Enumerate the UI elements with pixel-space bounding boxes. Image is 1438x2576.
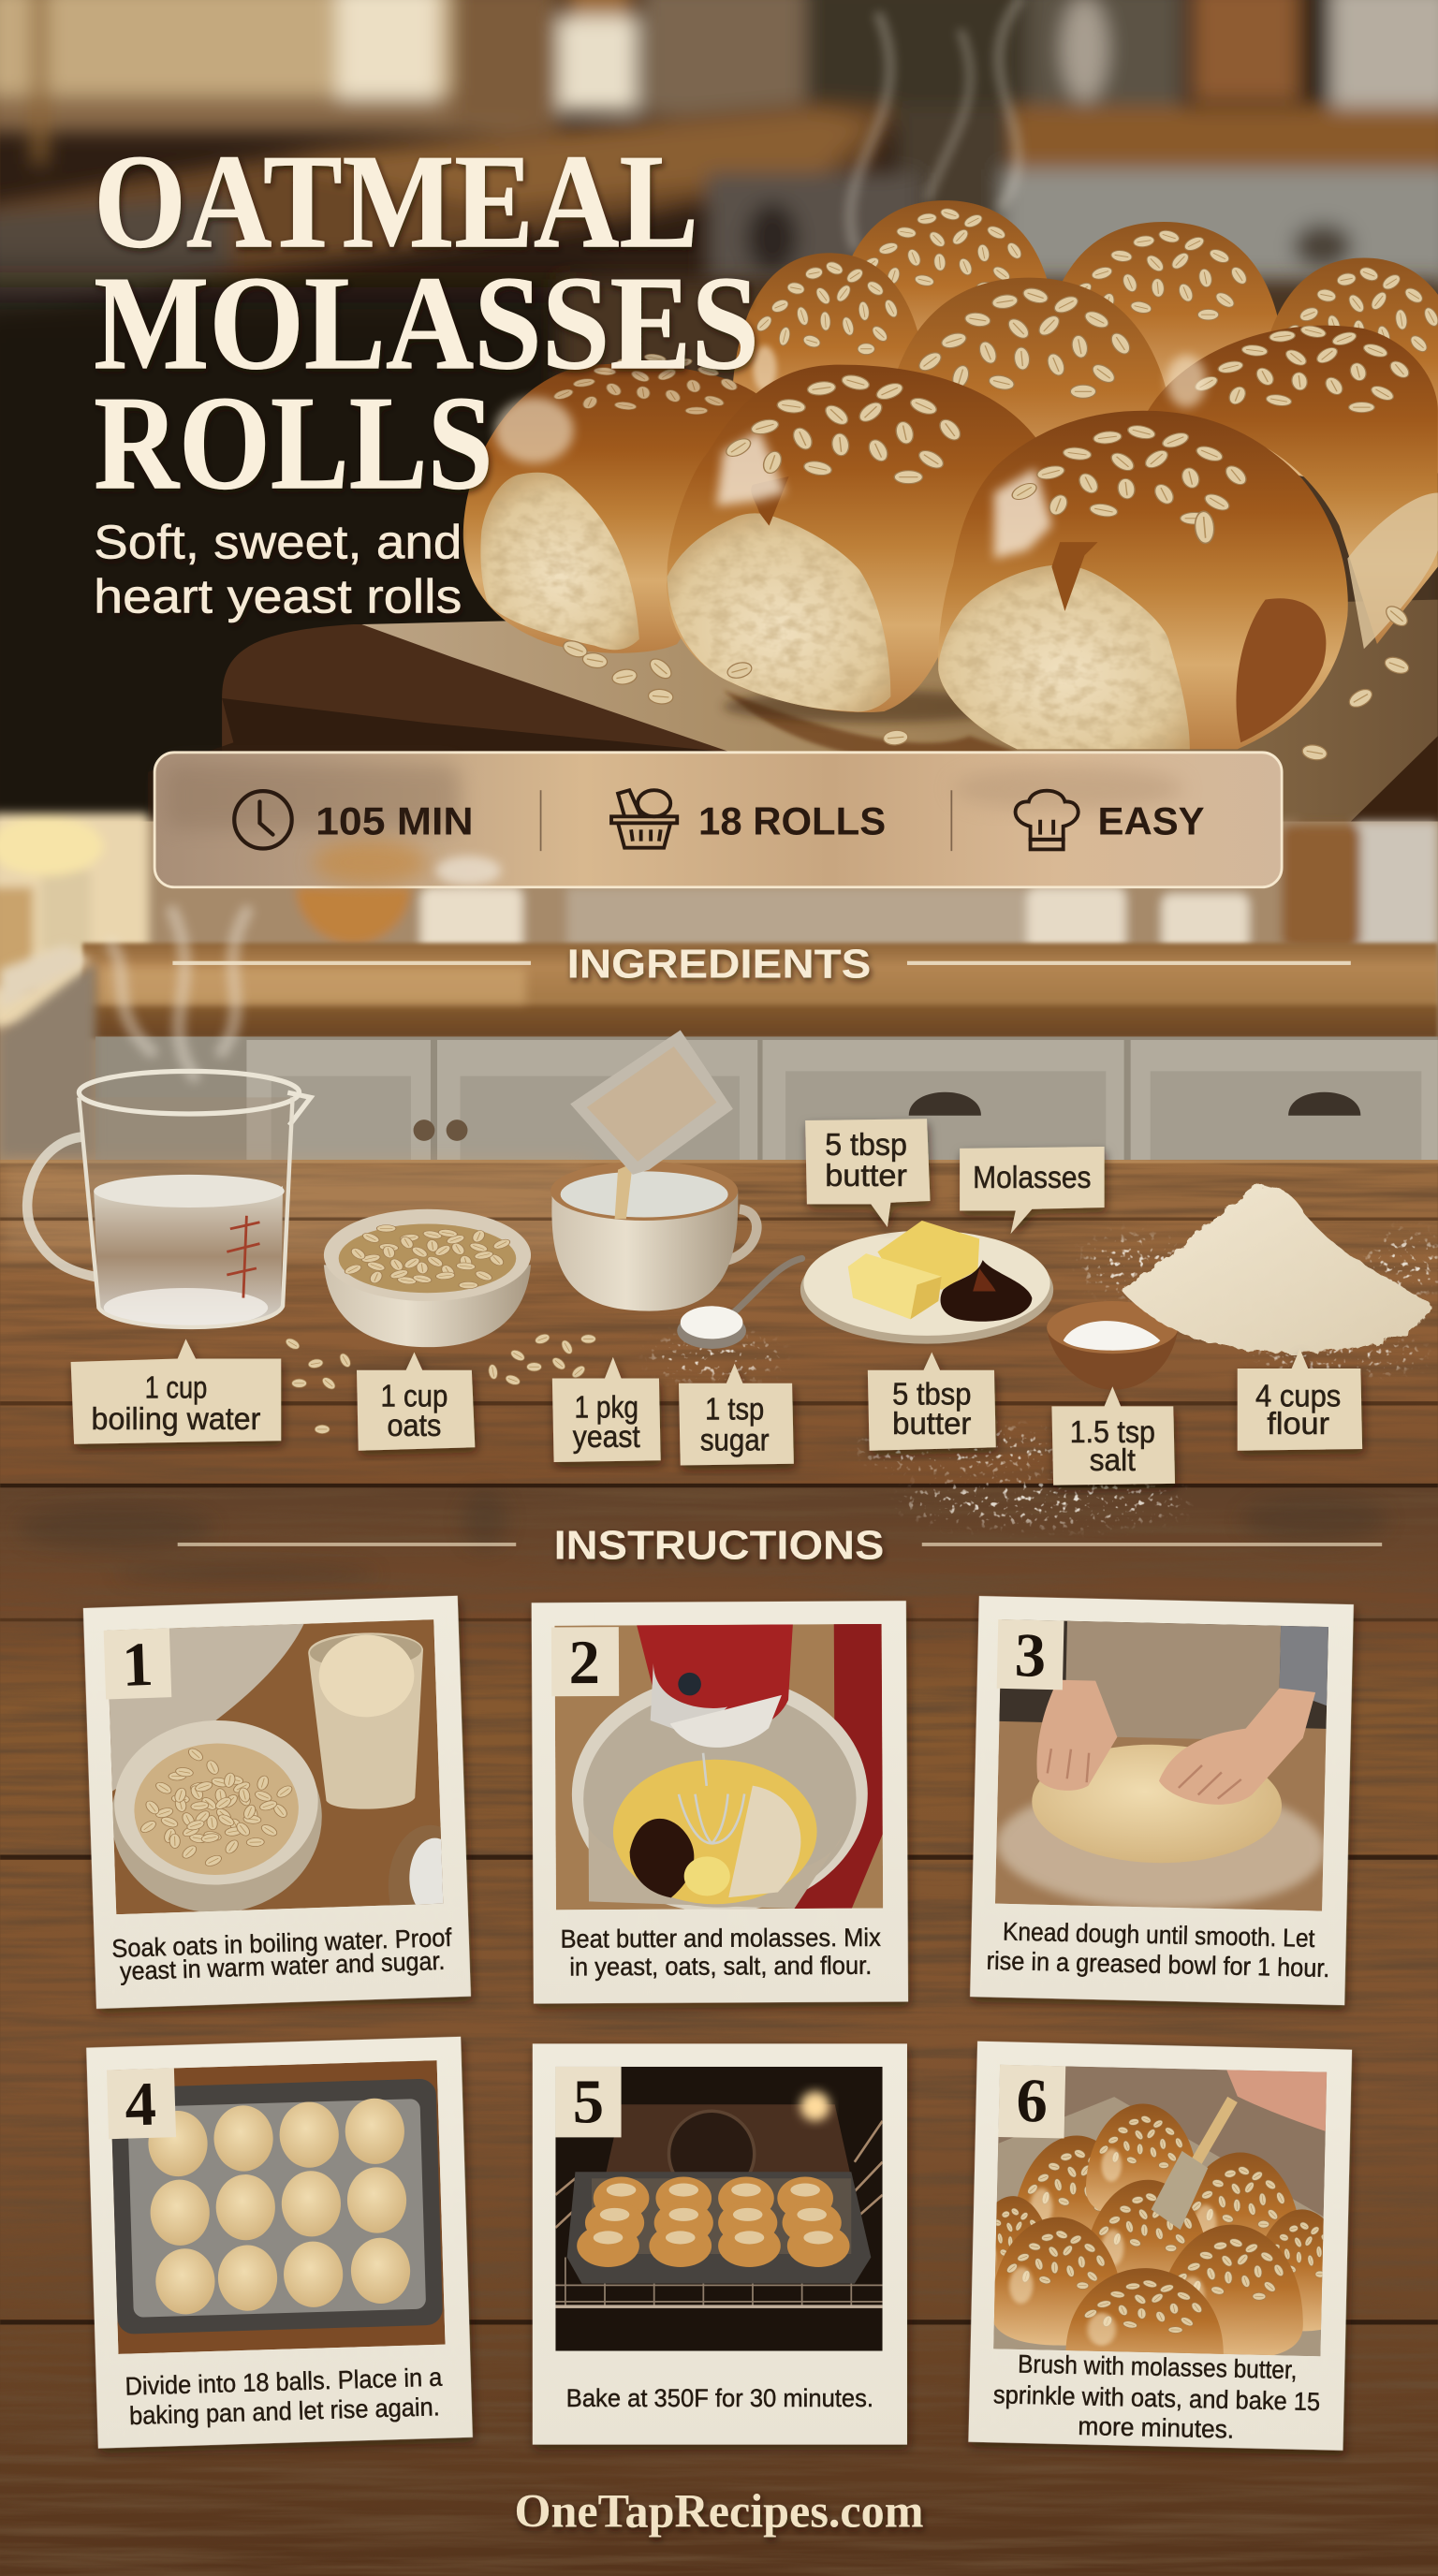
photo: dough balls in pan (110, 2060, 446, 2354)
step text: baking pan and let rise again. (129, 2392, 440, 2430)
rolls: back row (731, 200, 1438, 527)
label: butter (868, 1352, 996, 1451)
step text: Beat butter and molasses. Mix (560, 1923, 881, 1954)
label: flour: 4 cups (1255, 1379, 1341, 1413)
roll: front right (938, 411, 1348, 749)
icon: basket (611, 790, 677, 848)
wood table: lower (0, 1484, 1438, 2576)
label: oats: oats (387, 1409, 441, 1443)
label: sugar: 1 tsp (705, 1392, 764, 1427)
hero background: blurred kitchen (0, 0, 1438, 862)
step text: rise in a greased bowl for 1 hour. (986, 1946, 1330, 1983)
number tag: 4 (124, 2071, 157, 2140)
label: sugar (679, 1364, 794, 1466)
number tag: 5 (573, 2069, 604, 2137)
stats banner (154, 753, 1282, 887)
roll: right middle (1137, 324, 1438, 649)
label: yeast: yeast (573, 1420, 640, 1455)
label: butter: butter (892, 1407, 971, 1442)
title: OATMEAL (94, 127, 698, 276)
number tag: 3 (1014, 1621, 1047, 1690)
subtitle: Soft, sweet, and (94, 516, 462, 569)
label: salt (1051, 1386, 1175, 1486)
roll: front left (463, 353, 776, 653)
wooden board and parchment (148, 600, 1438, 822)
kitchen backdrop behind ingredients (0, 813, 1438, 1166)
wood table: upper (0, 1160, 1438, 1488)
label: top butter: butter (825, 1159, 907, 1193)
label: butter: 5 tbsp (892, 1378, 971, 1412)
step text (986, 1916, 1330, 1983)
step text: Knead dough until smooth. Let (1003, 1916, 1315, 1953)
label: flour (1238, 1349, 1362, 1451)
photo: kneading dough (995, 1619, 1330, 1912)
label: salt: 1.5 tsp (1070, 1415, 1155, 1450)
footer: website: OneTapRecipes.com (514, 2485, 924, 2538)
label: boiling water: boiling water (92, 1402, 260, 1437)
label: flour: flour (1267, 1407, 1329, 1442)
servings text: 18 ROLLS (698, 799, 886, 843)
ingredient: bowl of salt (1047, 1301, 1179, 1390)
icon: chef hat (1016, 791, 1078, 849)
title: MOLASSES (94, 249, 759, 398)
number tag (998, 2065, 1065, 2139)
step text (560, 1923, 881, 1982)
heading: ingredients (172, 941, 1351, 987)
step card 3 (970, 1596, 1354, 2005)
number tag: 2 (568, 1629, 600, 1697)
photo: brushing baked rolls (966, 2064, 1355, 2388)
step card 2 (532, 1601, 908, 2004)
number tag: 1 (121, 1631, 154, 1700)
step text (111, 1923, 453, 1986)
number tag: 6 (1016, 2067, 1049, 2136)
step card 1 (83, 1595, 477, 2009)
steam from jug (111, 912, 246, 1076)
step text (992, 2349, 1321, 2446)
step card 4 (86, 2037, 473, 2449)
step text (125, 2363, 444, 2430)
number tag (107, 2068, 176, 2140)
step text: Bake at 350F for 30 minutes. (566, 2383, 873, 2412)
number tag (551, 1627, 619, 1697)
label: oats (357, 1352, 475, 1451)
step card 6 (965, 2042, 1356, 2451)
number tag (997, 1619, 1064, 1690)
step text: Soak oats in boiling water. Proof (111, 1923, 452, 1963)
roll: front centre (667, 365, 1039, 712)
label: molasses (960, 1147, 1105, 1234)
flour dust on table (653, 1236, 1438, 1523)
heading: instructions (178, 1523, 1382, 1569)
ingredient: flour pile (1121, 1186, 1431, 1353)
subtitle (94, 516, 462, 623)
step text: Brush with molasses butter, (1018, 2349, 1298, 2384)
label: boiling water: 1 cup (145, 1371, 207, 1406)
scattered oats on table (284, 1332, 595, 1434)
title: ROLLS (94, 369, 493, 518)
heading: ingredients: INGREDIENTS (567, 941, 871, 987)
label: yeast: 1 pkg (575, 1391, 638, 1426)
number tag (104, 1629, 171, 1700)
steam above the rolls (850, 0, 1019, 246)
step text: Divide into 18 balls. Place in a (125, 2363, 443, 2401)
label: top butter: 5 tbsp (825, 1128, 907, 1163)
ingredient: jug of boiling water (27, 1071, 311, 1329)
ingredient: spoon of sugar (677, 1258, 802, 1349)
icon: clock (234, 791, 292, 849)
photo: soaked oats and yeast (107, 1619, 444, 1915)
heading: instructions: INSTRUCTIONS (554, 1523, 884, 1569)
number tag (555, 2067, 622, 2137)
time text: 105 MIN (315, 799, 474, 843)
subtitle: heart yeast rolls (94, 570, 462, 623)
ingredient: bowl of oats (324, 1209, 531, 1347)
ingredient: mug with yeast packet (550, 1030, 756, 1311)
label: boiling water (71, 1339, 281, 1444)
step text: more minutes. (1078, 2411, 1235, 2444)
title (94, 127, 759, 518)
ingredient: plate of butter and molasses (800, 1221, 1053, 1344)
label: oats: 1 cup (380, 1379, 448, 1413)
scattered oats under the rolls (561, 603, 1411, 762)
label: molasses: Molasses (973, 1161, 1092, 1195)
step card 5 (533, 2043, 907, 2445)
photo: stand mixer (554, 1624, 883, 1913)
label: salt: salt (1090, 1443, 1137, 1478)
label: sugar: sugar (700, 1424, 770, 1458)
label: top butter (805, 1119, 931, 1227)
step text: sprinkle with oats, and bake 15 (993, 2379, 1320, 2416)
step text: yeast in warm water and sugar. (119, 1946, 446, 1985)
difficulty text: EASY (1098, 799, 1205, 843)
step text: in yeast, oats, salt, and flour. (569, 1951, 872, 1981)
photo: rolls baking in oven (555, 2067, 883, 2351)
label: yeast (552, 1357, 661, 1462)
